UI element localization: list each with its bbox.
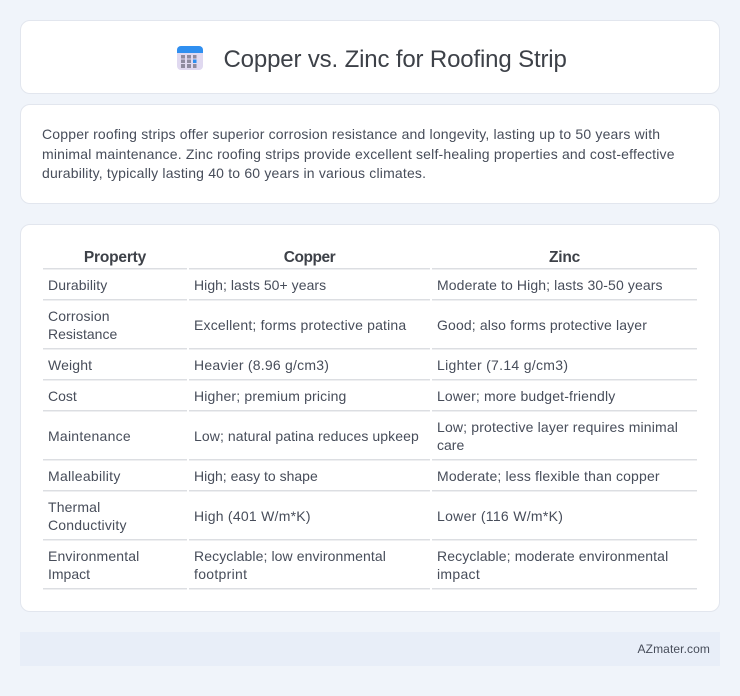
row: weight: Weight [48, 357, 92, 373]
row: environmental impact: Environmental [48, 548, 139, 564]
row: cost [48, 388, 616, 404]
panel: summary [20, 104, 720, 204]
table header: Property [84, 249, 146, 266]
row: corrosion resistance: Corrosion [48, 308, 110, 324]
comparison table [43, 249, 697, 590]
row: corrosion resistance: Good; also forms protective layer [437, 317, 647, 333]
row: maintenance: Low; natural patina reduces upkeep [194, 428, 419, 444]
row: malleability: Malleability [48, 468, 121, 484]
row: weight: Heavier (8.96 g/cm3) [194, 357, 329, 373]
row: weight [48, 357, 568, 373]
row: maintenance [48, 419, 678, 453]
row: environmental impact: Impact [48, 566, 90, 582]
row: environmental impact [48, 548, 668, 582]
row: malleability: Moderate; less flexible than copper [437, 468, 660, 484]
footer credit: AZmater.com [638, 642, 710, 656]
row: environmental impact: impact [437, 566, 480, 582]
row: malleability [48, 468, 660, 484]
header panel [20, 20, 720, 94]
panel: comparison table [20, 224, 720, 612]
footer bar [20, 632, 720, 666]
row: cost: Cost [48, 388, 77, 404]
row: corrosion resistance: Resistance [48, 326, 117, 342]
row: durability: Moderate to High; lasts 30-50 years [437, 277, 663, 293]
summary text: minimal maintenance. Zinc roofing strips provide excellent self-healing properties and cost-effective [42, 146, 675, 162]
table header [84, 249, 580, 266]
row: cost: Higher; premium pricing [194, 388, 347, 404]
row: corrosion resistance: Excellent; forms protective patina [194, 317, 406, 333]
row: thermal conductivity: Conductivity [48, 517, 127, 533]
icon: calendar [177, 46, 203, 70]
row: durability [48, 277, 663, 293]
row: durability: Durability [48, 277, 107, 293]
summary text: Copper roofing strips offer superior corrosion resistance and longevity, lasting up to 50 years with [42, 126, 660, 142]
row: environmental impact: Recyclable; moderate environmental [437, 548, 668, 564]
row: thermal conductivity: Lower (116 W/m*K) [437, 508, 563, 524]
title: Copper vs. Zinc for Roofing Strip [224, 46, 567, 73]
row: maintenance: Low; protective layer requires minimal [437, 419, 678, 435]
row: malleability: High; easy to shape [194, 468, 318, 484]
row: maintenance: Maintenance [48, 428, 131, 444]
row: environmental impact: footprint [194, 566, 247, 582]
summary text: durability, typically lasting 40 to 60 years in various climates. [42, 165, 426, 181]
row: environmental impact: Recyclable; low environmental [194, 548, 386, 564]
row: thermal conductivity: Thermal [48, 499, 100, 515]
summary text [42, 126, 675, 181]
row: thermal conductivity [48, 499, 563, 533]
row: corrosion resistance [48, 308, 647, 342]
row: cost: Lower; more budget-friendly [437, 388, 615, 404]
row: thermal conductivity: High (401 W/m*K) [194, 508, 311, 524]
table header: Zinc [549, 249, 580, 266]
row: maintenance: care [437, 437, 464, 453]
row: weight: Lighter (7.14 g/cm3) [437, 357, 568, 373]
row: durability: High; lasts 50+ years [194, 277, 326, 293]
table header: Copper [284, 249, 335, 266]
